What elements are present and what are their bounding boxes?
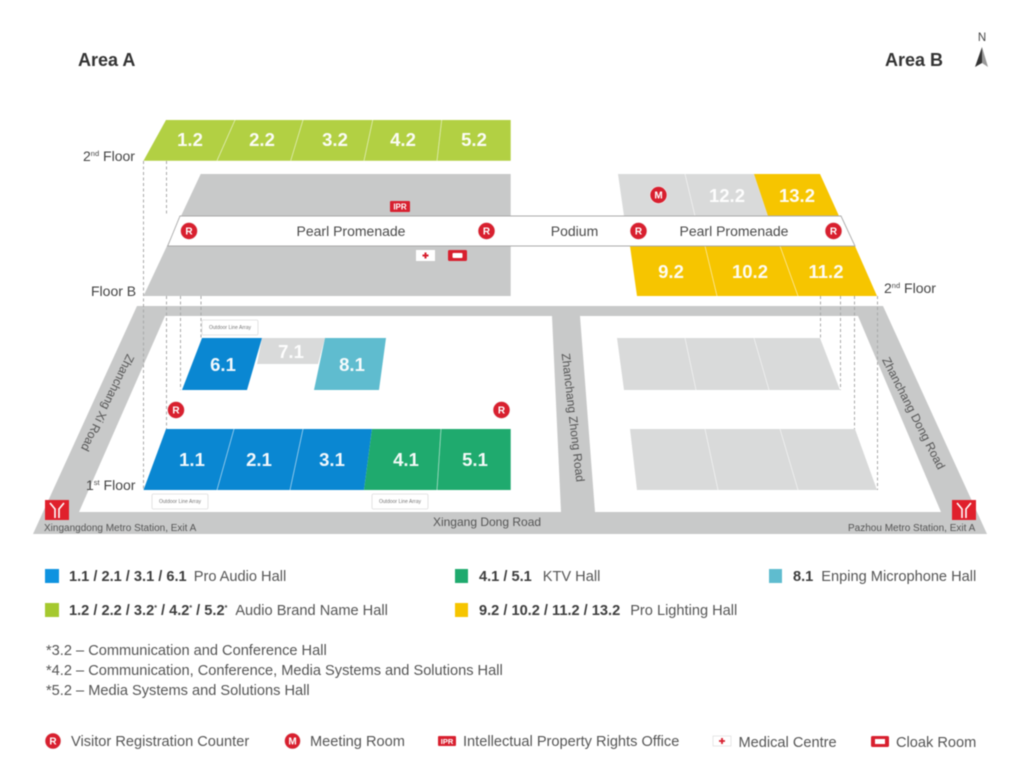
legend: facilities: Visitor Registration Counter bbox=[71, 734, 249, 750]
outdoor line array tags: Outdoor Line Array bbox=[209, 325, 251, 331]
legend: hall colours: 1.1 / 2.1 / 3.1 / 6.1 Pro Audio Hall bbox=[69, 569, 286, 585]
hall 13.2: 13.2 bbox=[779, 185, 815, 206]
footnotes: *5.2 – Media Systems and Solutions Hall bbox=[46, 683, 310, 699]
Pearl Promenade and Podium walkway: Pearl Promenade bbox=[680, 223, 789, 239]
outdoor line array tags bbox=[152, 320, 428, 509]
map markers: R bbox=[498, 406, 506, 416]
halls 1.2 to 5.2: 2nd floor Area A: 4.2 bbox=[390, 129, 416, 150]
floor B grey block bbox=[144, 174, 511, 296]
halls 9.2 to 11.2 bbox=[630, 246, 877, 296]
legend: hall colours: 9.2 / 10.2 / 11.2 / 13.2 Pro Lighting Hall bbox=[479, 603, 737, 619]
floor labels: 2 bbox=[884, 280, 892, 296]
halls 9.2 to 11.2: 10.2 bbox=[732, 261, 768, 282]
road labels bbox=[44, 352, 976, 534]
floor labels: nd bbox=[892, 281, 900, 290]
icon: metro right bbox=[952, 500, 976, 520]
road labels: Xingangdong Metro Station, Exit A bbox=[44, 523, 197, 534]
floor labels: 2 bbox=[83, 148, 91, 164]
hall 8.1: 8.1 bbox=[339, 354, 365, 375]
halls 9.2 to 11.2: 9.2 bbox=[658, 261, 684, 282]
road labels: Zhanchang Xi Road bbox=[78, 352, 137, 453]
heading: Area B: Area B bbox=[885, 50, 943, 70]
footnotes bbox=[46, 643, 503, 699]
floor labels: Floor B bbox=[91, 283, 136, 299]
halls 1.1 to 3.1: 2.1 bbox=[246, 449, 272, 470]
footnotes: *3.2 – Communication and Conference Hall bbox=[46, 643, 327, 659]
legend: hall colours: 1.2 / 2.2 / 3.2 bbox=[69, 603, 154, 619]
legend: hall colours: 8.1 Enping Microphone Hall bbox=[793, 569, 976, 585]
legend: facilities: Meeting Room bbox=[310, 734, 405, 750]
unlabelled lower grey halls Area B bbox=[630, 429, 877, 490]
halls 12.2 and meeting room block bbox=[618, 174, 768, 216]
road labels: Pazhou Metro Station, Exit A bbox=[848, 523, 976, 534]
halls 1.2 to 5.2: 2nd floor Area A: 2.2 bbox=[249, 129, 275, 150]
icon: medical centre on map bbox=[416, 250, 435, 261]
halls 1.1 to 3.1 bbox=[144, 429, 372, 490]
icon: IPR office on map: IPR bbox=[393, 203, 407, 212]
halls 1.1 to 3.1: 3.1 bbox=[319, 449, 345, 470]
icon: cloak room on map bbox=[448, 250, 467, 261]
hall 7.1 bbox=[257, 338, 325, 364]
icon: metro left bbox=[45, 500, 69, 520]
hall 13.2 bbox=[754, 174, 839, 216]
hall 7.1: 7.1 bbox=[278, 341, 304, 362]
legend: hall colours: 4.1 / 5.1 KTV Hall bbox=[479, 569, 600, 585]
floor labels bbox=[83, 148, 936, 493]
icon: north arrow bbox=[975, 32, 988, 67]
legend: facilities: Medical Centre bbox=[738, 735, 837, 751]
floor labels: st bbox=[94, 478, 101, 487]
legend: hall colours bbox=[45, 569, 976, 619]
floor labels: Floor bbox=[900, 280, 936, 296]
halls 4.1 and 5.1: 5.1 bbox=[462, 449, 488, 470]
legend: facilities: Cloak Room bbox=[896, 735, 976, 751]
halls 12.2 and meeting room block: 12.2 bbox=[709, 185, 745, 206]
halls 1.2 to 5.2: 2nd floor Area A bbox=[144, 120, 511, 161]
legend: hall colours: * bbox=[154, 605, 157, 612]
Pearl Promenade and Podium walkway: Podium bbox=[551, 223, 598, 239]
icon: north arrow: N bbox=[978, 32, 986, 44]
halls 9.2 to 11.2: 11.2 bbox=[808, 261, 844, 282]
map markers: R bbox=[483, 226, 491, 238]
legend: hall colours: / 5.2 bbox=[192, 603, 225, 619]
hall 8.1 bbox=[314, 338, 386, 390]
icon: IPR office on map bbox=[390, 201, 410, 212]
map markers: R bbox=[635, 226, 643, 238]
outdoor line array tags: Outdoor Line Array bbox=[159, 499, 201, 505]
map markers: R bbox=[830, 226, 838, 238]
map markers: M bbox=[654, 190, 663, 202]
map markers bbox=[168, 186, 842, 418]
outdoor line array tags: Outdoor Line Array bbox=[379, 499, 421, 505]
legend: facilities: M bbox=[288, 736, 297, 748]
road labels: Xingang Dong Road bbox=[433, 515, 541, 529]
map markers: R bbox=[185, 226, 193, 238]
legend: hall colours: / 4.2 bbox=[157, 603, 189, 619]
legend: facilities: Intellectual Property Rights Office bbox=[463, 734, 679, 750]
dashed projection lines bbox=[144, 161, 878, 490]
road network bbox=[33, 306, 987, 534]
legend: hall colours: * bbox=[225, 605, 228, 612]
floor labels: nd bbox=[91, 149, 99, 158]
road labels: Zhanchang Dong Road bbox=[879, 355, 948, 472]
legend: hall colours: Audio Brand Name Hall bbox=[235, 603, 388, 619]
legend: facilities: IPR bbox=[441, 737, 454, 746]
floor labels: 1 bbox=[86, 477, 94, 493]
hall 6.1 bbox=[182, 338, 262, 390]
road labels: Zhanchang Zhong Road bbox=[559, 352, 587, 483]
legend: facilities bbox=[45, 733, 976, 751]
halls 4.1 and 5.1 bbox=[364, 429, 511, 490]
floor labels: Floor bbox=[100, 477, 136, 493]
halls 4.1 and 5.1: 4.1 bbox=[393, 449, 419, 470]
footnotes: *4.2 – Communication, Conference, Media Systems and Solutions Hall bbox=[46, 663, 503, 679]
Pearl Promenade and Podium walkway: Pearl Promenade bbox=[297, 223, 406, 239]
legend: facilities: R bbox=[49, 736, 57, 748]
unlabelled upper grey halls Area B bbox=[617, 338, 840, 390]
heading: Area A: Area A bbox=[78, 50, 135, 70]
floor labels: Floor bbox=[99, 148, 135, 164]
map markers: R bbox=[172, 406, 180, 416]
halls 1.2 to 5.2: 2nd floor Area A: 3.2 bbox=[322, 129, 348, 150]
Pearl Promenade and Podium walkway bbox=[168, 216, 855, 246]
halls 1.2 to 5.2: 2nd floor Area A: 1.2 bbox=[177, 129, 203, 150]
legend: hall colours: * bbox=[189, 605, 192, 612]
hall 6.1: 6.1 bbox=[210, 354, 236, 375]
halls 1.2 to 5.2: 2nd floor Area A: 5.2 bbox=[461, 129, 487, 150]
halls 1.1 to 3.1: 1.1 bbox=[179, 449, 205, 470]
